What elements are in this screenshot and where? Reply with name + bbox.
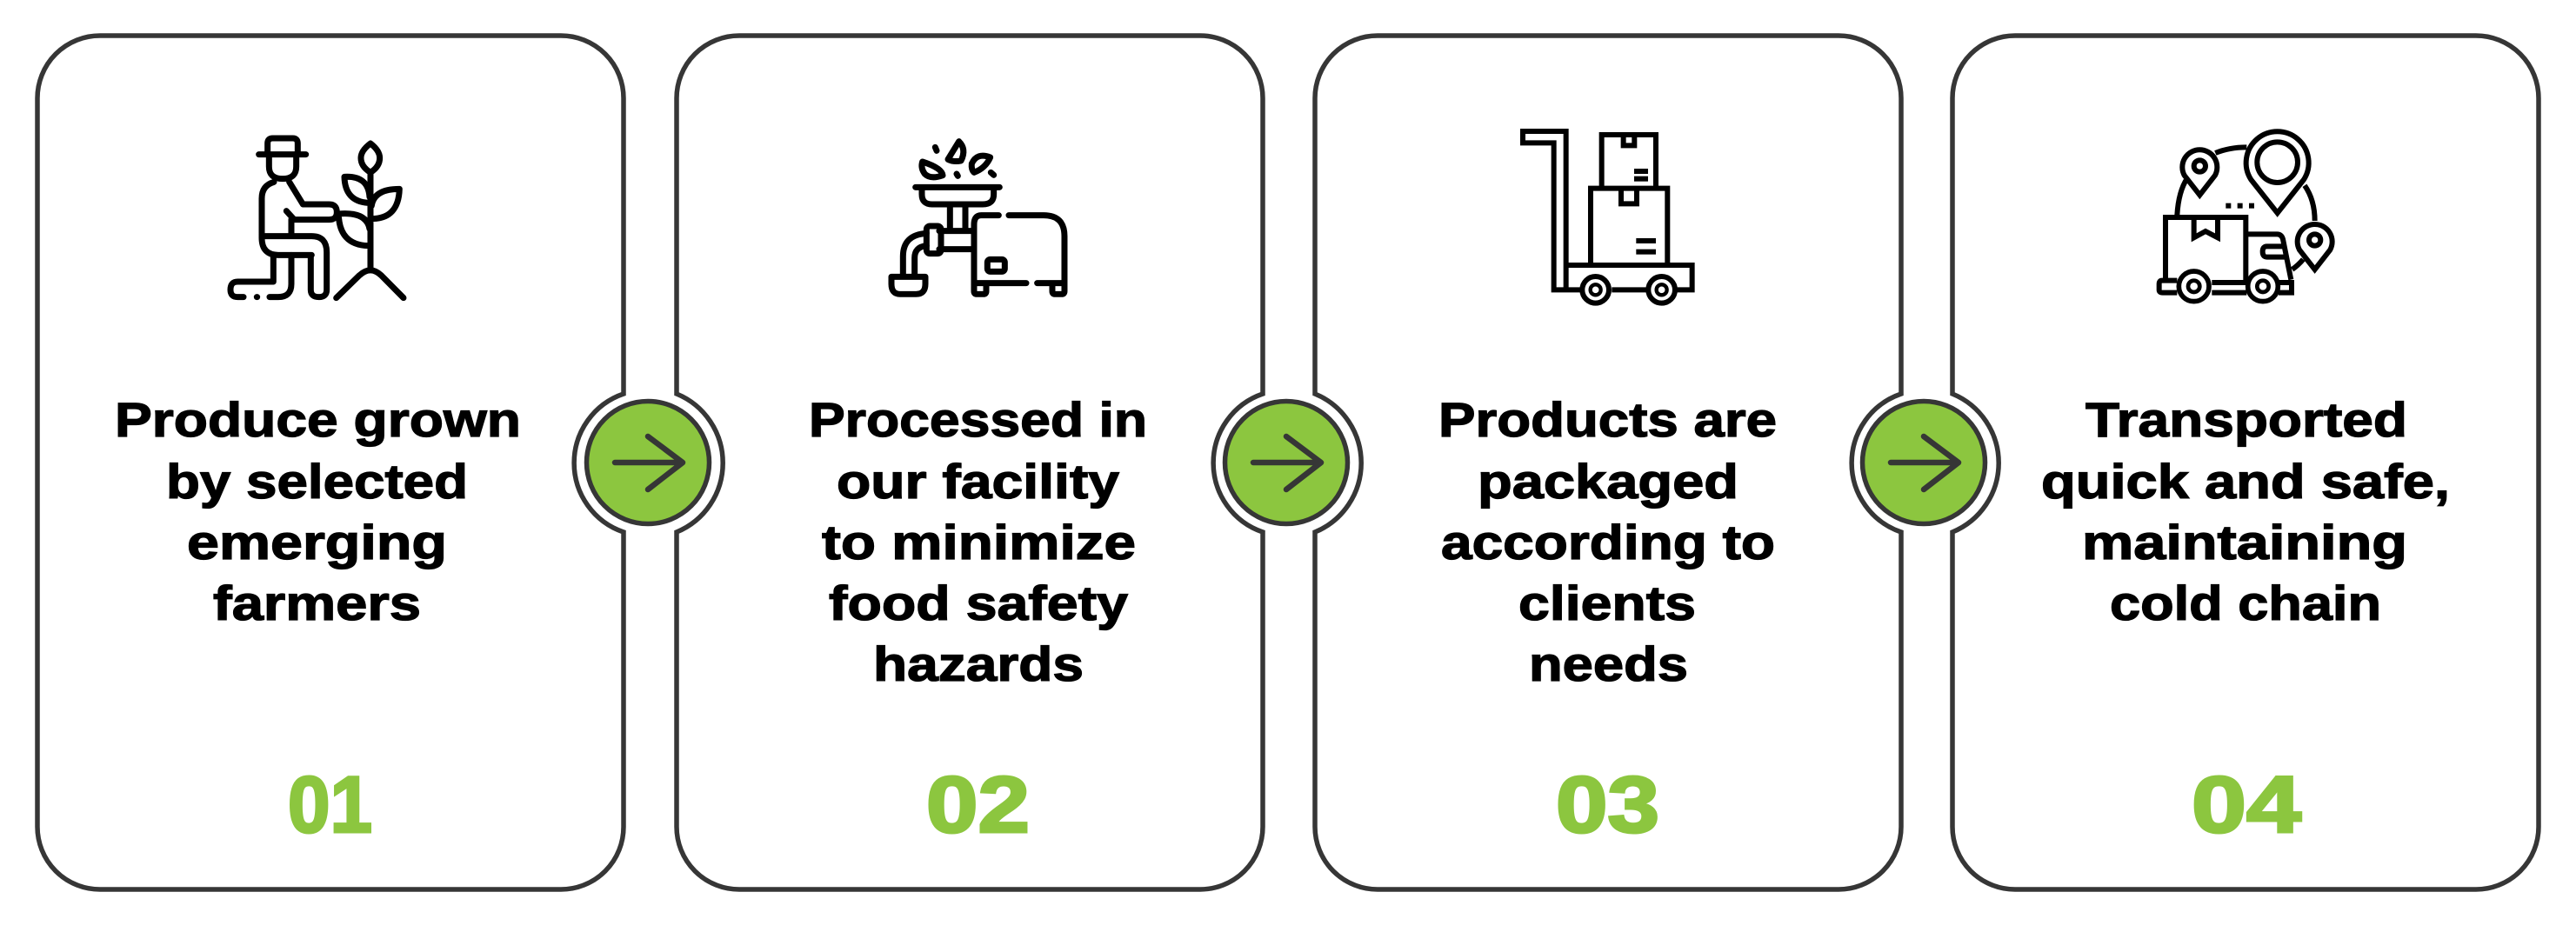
step 1 description <box>115 392 521 630</box>
step 3 description: clients <box>1518 576 1696 630</box>
step 4 description: Transported <box>2085 392 2407 447</box>
icon: delivery truck with location pins <box>2159 131 2332 302</box>
step 1 description: emerging <box>187 515 447 569</box>
step 3 description: needs <box>1529 636 1688 691</box>
panel: step 3 <box>1315 36 1901 889</box>
panel: step 1 <box>37 36 624 889</box>
step number 01: 01 <box>288 761 372 849</box>
step 4 description <box>2041 392 2450 630</box>
step 2 description: to minimize <box>822 515 1136 569</box>
arrow badge 2 <box>1225 402 1348 523</box>
arrow badge 3 <box>1863 402 1985 523</box>
icon: farmer with plant <box>230 138 404 298</box>
card outline 4 <box>1952 36 2539 889</box>
card outline 1 <box>37 36 624 889</box>
step number 03: 03 <box>1556 761 1659 849</box>
step 3 description <box>1438 392 1777 691</box>
panel: step 2 <box>677 36 1263 889</box>
step 1 description: farmers <box>213 576 421 630</box>
card outline 3 <box>1315 36 1901 889</box>
step 4 description: cold chain <box>2110 576 2381 630</box>
icon: hand truck with boxes <box>1523 131 1692 303</box>
icon: grinder machine <box>891 142 1064 294</box>
panel: step 4 <box>1952 36 2539 889</box>
step 4 description: maintaining <box>2082 515 2407 569</box>
card outline 2 <box>677 36 1263 889</box>
step 2 description: hazards <box>873 636 1084 691</box>
step 1 description: by selected <box>166 454 468 509</box>
step 3 description: according to <box>1441 515 1775 569</box>
step 2 description: Processed in <box>809 392 1147 447</box>
step 3 description: packaged <box>1478 454 1738 509</box>
step 4 description: quick and safe, <box>2041 454 2450 509</box>
step 2 description: our facility <box>837 454 1119 509</box>
step 3 description: Products are <box>1438 392 1777 447</box>
step 2 description <box>809 392 1147 691</box>
step 2 description: food safety <box>829 576 1128 630</box>
arrow badge 1 <box>586 402 710 523</box>
step number 02: 02 <box>926 761 1030 849</box>
step number 04: 04 <box>2192 761 2301 849</box>
step 1 description: Produce grown <box>115 392 521 447</box>
